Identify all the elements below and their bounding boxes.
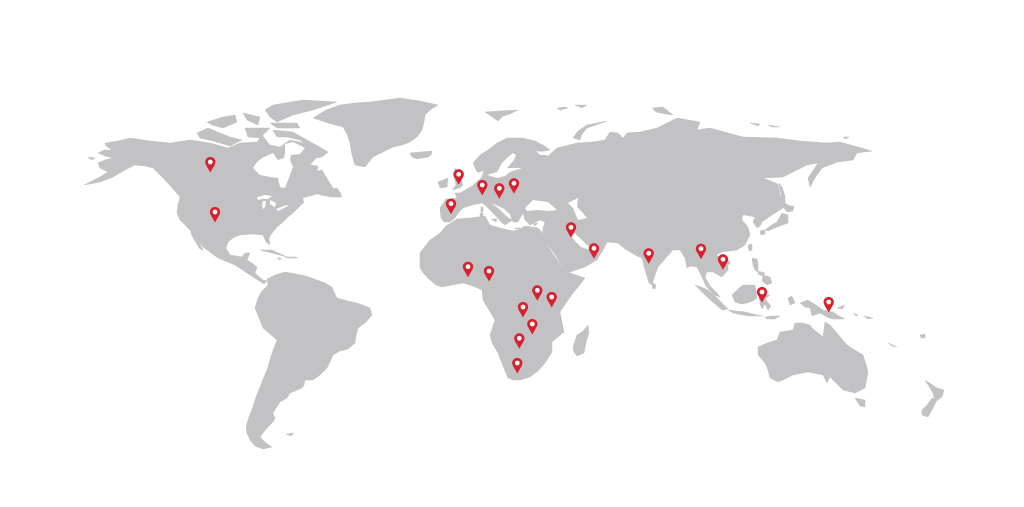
pin: South Africa: [512, 358, 522, 374]
continent: Africa: [420, 216, 585, 380]
pin: India: [644, 248, 654, 264]
island: Tasmania: [855, 398, 865, 407]
island: Aleutians: [88, 157, 95, 160]
island: Baffin: [273, 130, 328, 153]
pin: Indonesia: [757, 287, 767, 302]
continent: Australia: [758, 322, 868, 407]
inland seas: [487, 150, 595, 250]
island: Devon: [270, 123, 300, 128]
pin: Germany: [477, 180, 488, 196]
islands: British Isles: [438, 168, 463, 190]
pin: Nigeria east: [484, 266, 494, 282]
island: Banks: [207, 115, 237, 128]
pin: Zambia: [527, 319, 538, 334]
islands: New Zealand: [922, 380, 944, 417]
island: Melville: [243, 113, 260, 125]
pin: Spain: [446, 199, 456, 214]
island: Greenland: [313, 98, 438, 167]
pin: UAE: [589, 243, 599, 259]
pin: Poland: [509, 178, 519, 194]
pin: United States: [210, 207, 220, 222]
islands: Japan and Sakhalin: [760, 183, 794, 235]
pin: Kenya: [546, 292, 557, 308]
pin: Uganda: [532, 285, 542, 301]
island: Iceland: [410, 151, 432, 159]
island: Newfoundland: [330, 188, 341, 196]
continent: North America: [84, 100, 342, 284]
island: Baja California: [191, 229, 203, 250]
continent: South America: [246, 272, 372, 449]
islands: Arctic: [485, 105, 849, 140]
island: Ellesmere: [265, 100, 337, 122]
pin: Botswana: [514, 333, 524, 349]
pin: Vietnam: [718, 254, 728, 270]
island: Somerset: [245, 128, 270, 138]
pin: Nigeria west: [463, 262, 473, 277]
island: New Guinea: [800, 300, 925, 347]
pin: DR Congo: [518, 302, 528, 318]
pin: Papua New Guinea: [824, 297, 834, 312]
inland waters: Hudson Bay, Foxe Basin and lakes: [253, 142, 322, 211]
islands: Mediterranean: [480, 207, 538, 229]
island: Victoria: [197, 128, 242, 146]
pin: Iraq: [566, 222, 576, 238]
continent: Eurasia: [440, 118, 872, 297]
pin: Czech Republic: [494, 183, 504, 199]
island group: Caribbean: [260, 250, 298, 260]
pin: Myanmar: [696, 244, 706, 259]
pin: Canada: [205, 157, 216, 172]
island: Madagascar: [573, 325, 589, 356]
island: Falklands: [286, 433, 294, 436]
pin: United Kingdom: [454, 169, 464, 185]
islands: Southeast Asia: [652, 244, 795, 319]
